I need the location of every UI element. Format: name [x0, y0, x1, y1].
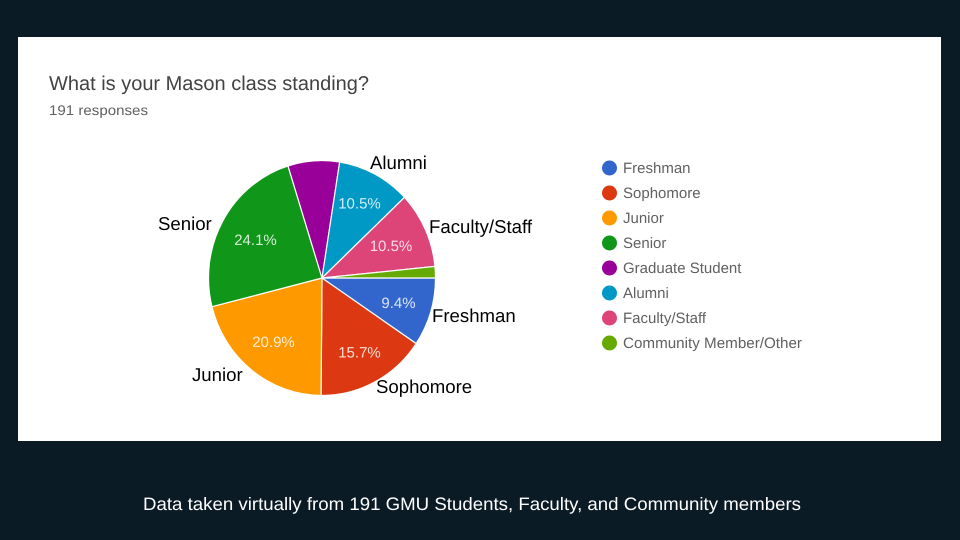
footer caption: Data taken virtually from 191 GMU Students, Faculty, and Community members — [143, 494, 801, 514]
percentage labels: 10.5% — [338, 196, 381, 212]
legend — [602, 160, 802, 352]
slice: Freshman — [322, 278, 436, 344]
slice: Faculty/Staff — [322, 197, 435, 278]
slice: Junior — [212, 278, 322, 395]
callout labels: Freshman — [432, 305, 516, 326]
percentage labels: 20.9% — [252, 334, 295, 351]
legend item: Faculty/Staff: Faculty/Staff — [623, 310, 707, 327]
legend item: Junior — [602, 210, 664, 227]
percentage labels: 9.4% — [381, 295, 416, 312]
slice: Community Member/Other — [322, 266, 436, 278]
slice: Alumni — [322, 162, 405, 278]
percentage labels: 15.7% — [338, 344, 381, 362]
legend item: Freshman: Freshman — [623, 160, 691, 177]
title: What is your Mason class standing? — [49, 73, 369, 95]
legend item: Junior: Junior — [623, 210, 664, 227]
percentage labels: 24.1% — [234, 232, 277, 249]
legend item: Graduate Student: Graduate Student — [623, 260, 742, 277]
slice: Graduate Student — [288, 161, 340, 278]
legend item: Senior — [602, 235, 666, 252]
percentage labels — [234, 196, 416, 362]
percentage labels: 10.5% — [370, 238, 412, 255]
panel: survey chart card — [18, 37, 941, 441]
pie chart — [209, 161, 436, 395]
callout labels: Senior — [158, 213, 212, 234]
callout labels: Junior — [192, 364, 243, 385]
legend item: Senior: Senior — [623, 235, 666, 252]
legend item: Alumni — [602, 285, 669, 302]
callout labels: Alumni — [370, 152, 427, 173]
callout labels — [158, 152, 533, 397]
legend item: Alumni: Alumni — [623, 285, 669, 302]
callout labels: Sophomore — [376, 376, 472, 397]
legend item: Community Member/Other: Community Member/Other — [623, 335, 802, 352]
legend item: Sophomore: Sophomore — [623, 185, 701, 202]
response count: 191 responses — [49, 102, 148, 118]
slice: Senior — [209, 166, 322, 307]
callout labels: Faculty/Staff — [429, 216, 533, 237]
slice: Sophomore — [321, 278, 416, 395]
